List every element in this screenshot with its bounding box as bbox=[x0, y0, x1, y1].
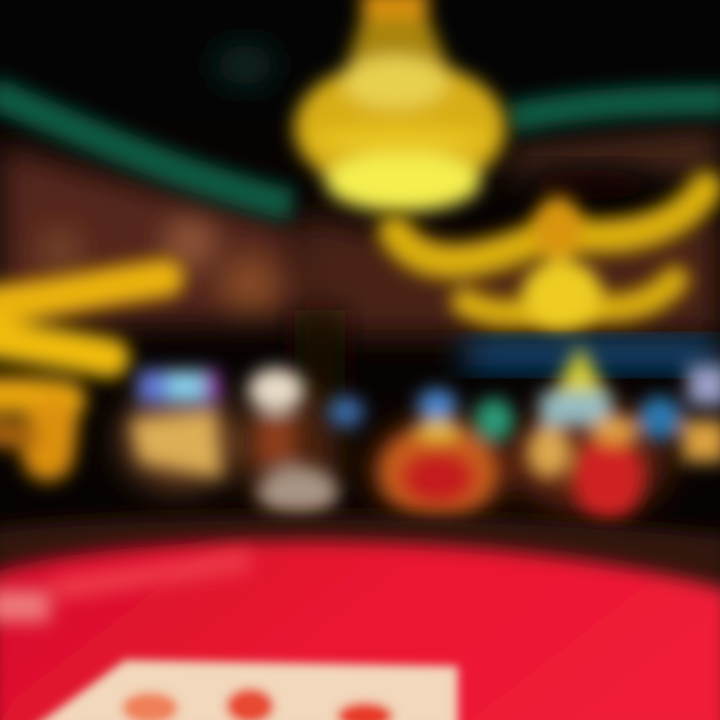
dark gap under right arms bbox=[520, 169, 660, 201]
machine 3 bbox=[328, 396, 364, 428]
table rim bbox=[0, 514, 720, 600]
machine 4 bbox=[417, 389, 457, 421]
ceiling bbox=[0, 0, 720, 120]
left yellow chandelier bbox=[0, 278, 165, 455]
green ceiling bands bbox=[0, 92, 720, 205]
dark central column bbox=[295, 310, 345, 420]
blue light strip bbox=[465, 342, 720, 368]
machine 6 bbox=[688, 365, 720, 405]
card on table bbox=[30, 660, 458, 720]
machine 5 bbox=[554, 345, 606, 392]
main chandelier bbox=[294, 0, 506, 212]
second chandelier body bbox=[522, 196, 602, 331]
machine 2 bbox=[248, 368, 304, 412]
ceiling glow bbox=[215, 45, 275, 85]
table highlights bbox=[0, 550, 250, 622]
machine 1 bbox=[138, 370, 218, 404]
slot machines bbox=[120, 390, 670, 520]
brown wall bbox=[0, 130, 720, 335]
red table bbox=[0, 541, 720, 720]
second chandelier arms bbox=[395, 188, 706, 313]
